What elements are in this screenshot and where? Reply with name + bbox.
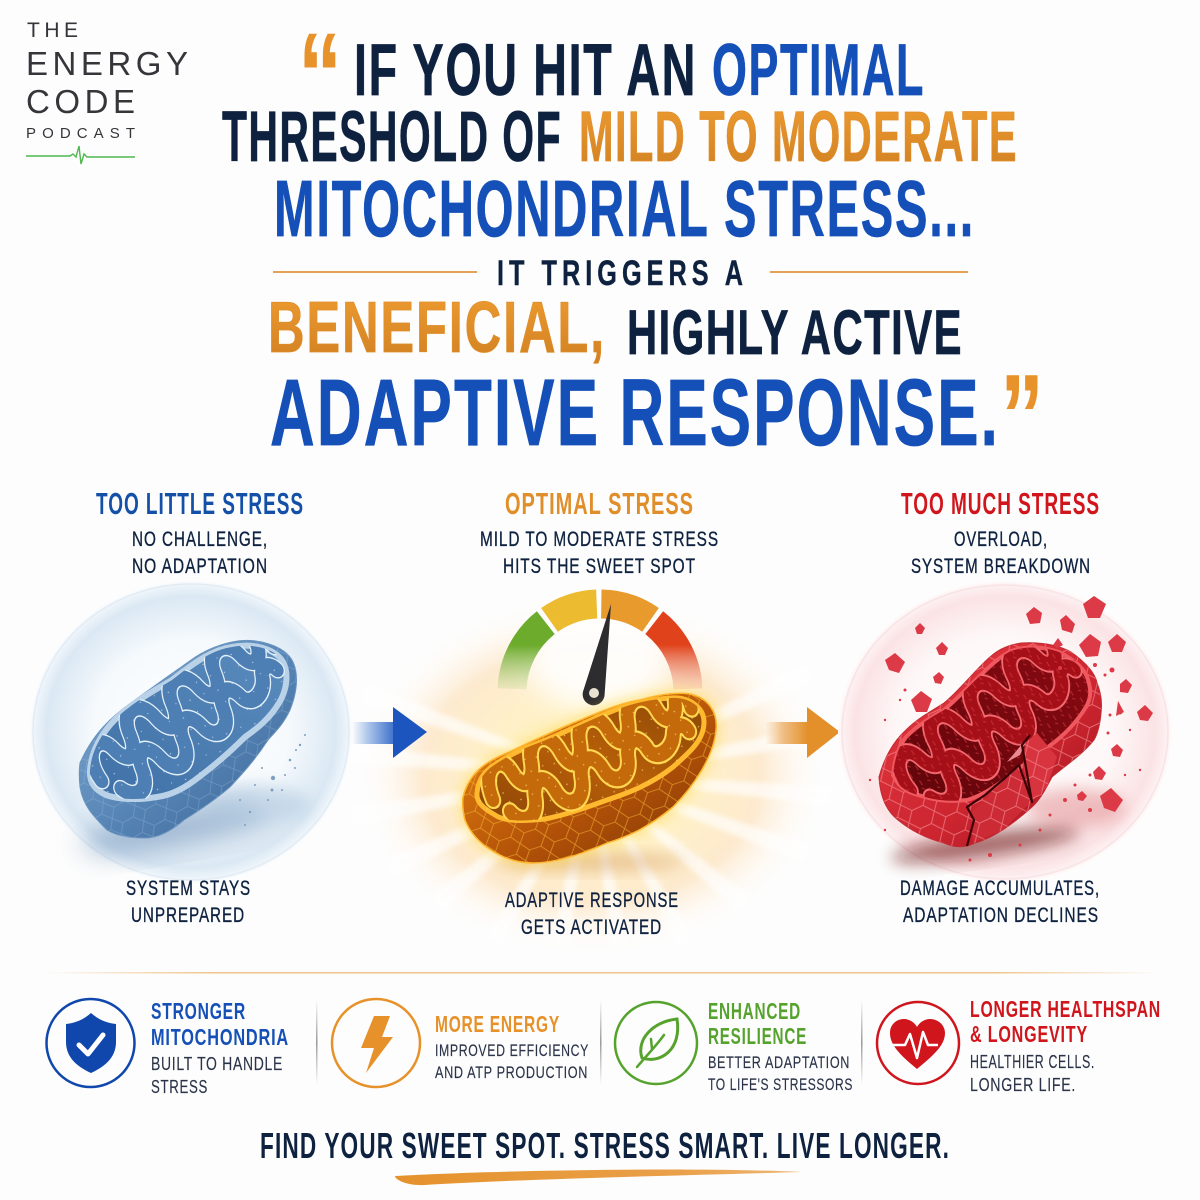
headline quote	[222, 8, 1044, 484]
panel: too little stress: NO ADAPTATION	[132, 555, 268, 578]
logo: The Energy Code Podcast	[26, 19, 188, 164]
headline quote: HIGHLY ACTIVE	[627, 298, 963, 368]
icon: lightning bolt	[332, 999, 420, 1087]
benefit: longer healthspan	[877, 996, 1161, 1095]
arrow: low to optimal	[352, 707, 427, 758]
panel: optimal stress: ADAPTIVE RESPONSE	[505, 889, 679, 912]
logo: The Energy Code Podcast: CODE	[26, 83, 135, 120]
benefit: stronger mitochondria	[46, 998, 289, 1097]
logo: The Energy Code Podcast: ENERGY	[26, 45, 188, 82]
benefit: more energy: MORE ENERGY	[435, 1011, 560, 1037]
benefit: more energy	[332, 999, 589, 1087]
benefit: stronger mitochondria: STRESS	[151, 1076, 208, 1097]
cracks and shards	[967, 733, 1057, 846]
panel: too much stress: ADAPTATION DECLINES	[903, 904, 1099, 927]
panel: too much stress	[838, 486, 1172, 927]
logo: The Energy Code Podcast: THE	[27, 19, 78, 42]
benefit: longer healthspan: LONGER LIFE.	[970, 1075, 1076, 1095]
benefit: more energy: AND ATP PRODUCTION	[435, 1063, 588, 1082]
icon: leaf	[615, 1002, 697, 1084]
glow and sunburst rays	[350, 597, 830, 953]
benefit: enhanced resilience: BETTER ADAPTATION	[708, 1053, 850, 1072]
benefit: stronger mitochondria: STRONGER	[151, 998, 246, 1024]
benefit: longer healthspan: HEALTHIER CELLS.	[970, 1052, 1095, 1072]
benefit: stronger mitochondria: BUILT TO HANDLE	[151, 1053, 283, 1074]
logo: The Energy Code Podcast: PODCAST	[26, 125, 135, 142]
opening quotation mark: “	[298, 8, 342, 142]
panel: too little stress	[30, 486, 352, 927]
panel: too much stress: DAMAGE ACCUMULATES,	[900, 877, 1100, 900]
panel: too little stress: TOO LITTLE STRESS	[96, 486, 304, 521]
benefit: stronger mitochondria: MITOCHONDRIA	[151, 1024, 289, 1050]
gauge needle	[583, 604, 611, 705]
arrow: optimal to high	[765, 707, 840, 758]
benefit: more energy: IMPROVED EFFICIENCY	[435, 1041, 589, 1060]
panel: optimal stress: MILD TO MODERATE STRESS	[480, 528, 719, 551]
headline quote: OPTIMAL	[712, 30, 925, 111]
flying fragments	[869, 596, 1153, 862]
panel: optimal stress	[383, 492, 800, 934]
panel: optimal stress: OPTIMAL STRESS	[505, 486, 694, 521]
panel: too much stress: OVERLOAD,	[954, 528, 1048, 551]
panel: too little stress: SYSTEM STAYS	[126, 877, 251, 900]
closing quotation mark: ”	[1000, 350, 1044, 484]
headline quote: BENEFICIAL,	[268, 288, 606, 368]
benefit: longer healthspan: & LONGEVITY	[970, 1021, 1088, 1047]
panel: too little stress: UNPREPARED	[131, 904, 245, 927]
icon: shield	[46, 999, 134, 1087]
icon: heart with pulse	[877, 1002, 959, 1084]
panel: too much stress: SYSTEM BREAKDOWN	[911, 555, 1091, 578]
panel: optimal stress: HITS THE SWEET SPOT	[503, 555, 696, 578]
illustration: red broken mitochondrion	[838, 581, 1172, 883]
illustration: blue bubble and mitochondrion	[30, 581, 352, 883]
illustration: glowing orange mitochondrion	[463, 683, 716, 871]
benefit: enhanced resilience: RESILIENCE	[708, 1023, 807, 1049]
gauge	[512, 604, 688, 705]
benefit: enhanced resilience: TO LIFE'S STRESSORS	[708, 1075, 853, 1094]
headline quote: IT TRIGGERS A	[497, 254, 748, 293]
benefit: enhanced resilience	[615, 998, 853, 1094]
headline quote: THRESHOLD OF	[222, 98, 562, 177]
panel: optimal stress: GETS ACTIVATED	[521, 916, 662, 939]
headline quote: IF YOU HIT AN	[354, 30, 697, 111]
benefit: enhanced resilience: ENHANCED	[708, 998, 801, 1024]
panel: too little stress: NO CHALLENGE,	[132, 528, 268, 551]
swoosh underline	[395, 1169, 802, 1185]
